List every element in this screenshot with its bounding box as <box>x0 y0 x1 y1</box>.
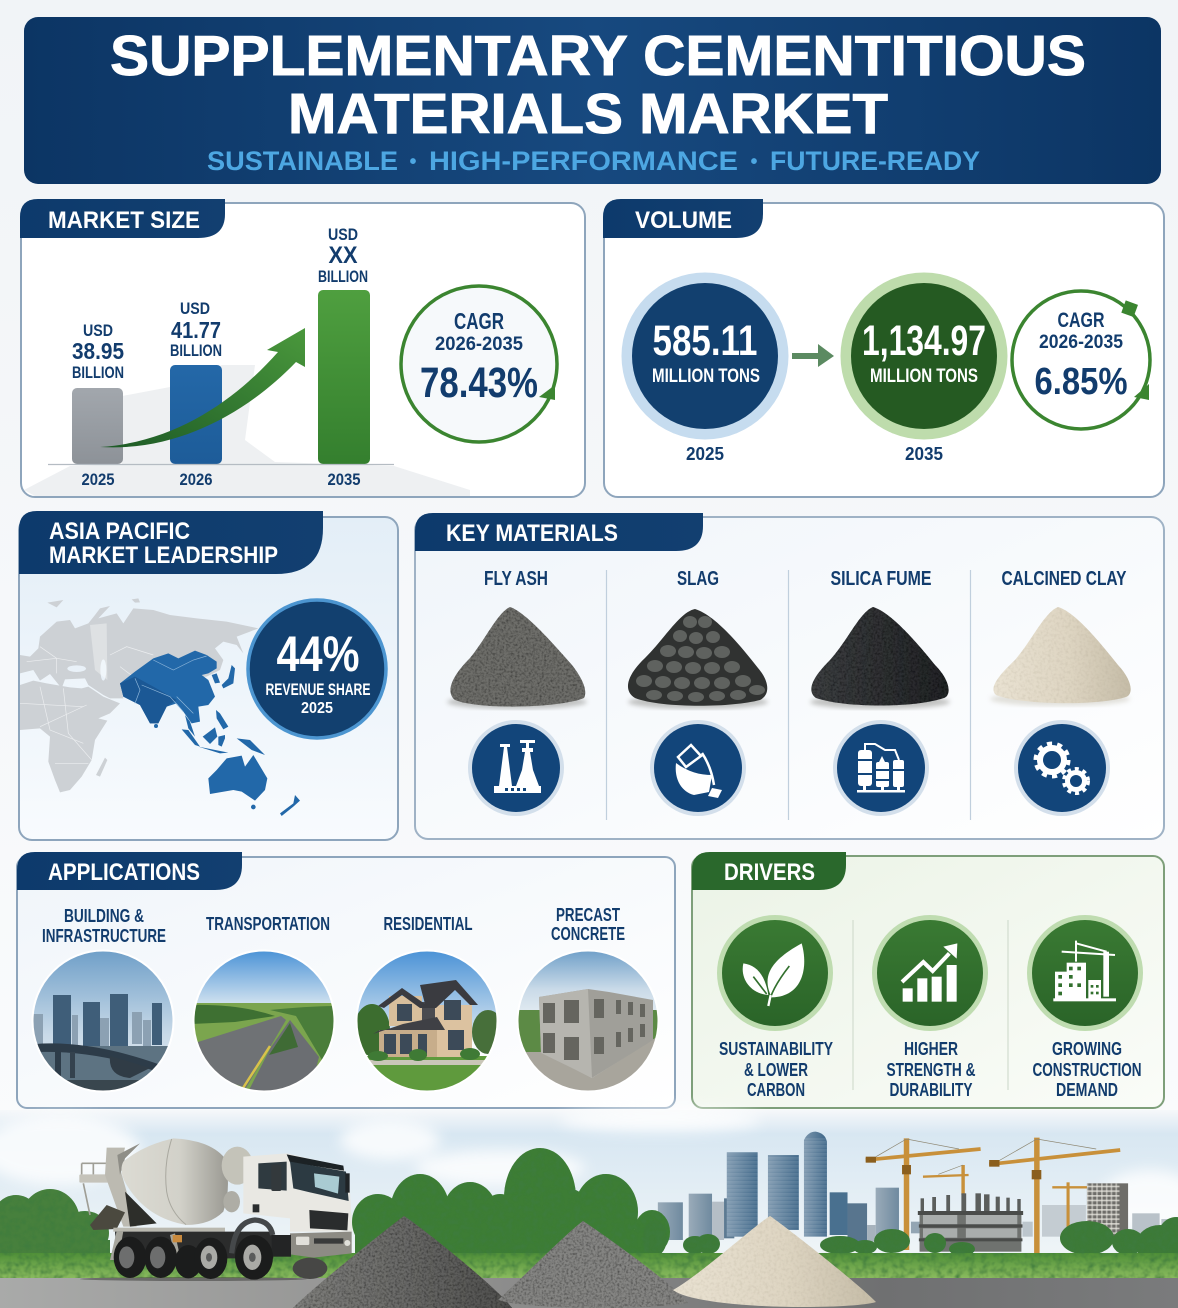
CAGR badge: volume: 6.85% <box>1034 361 1128 403</box>
heading: asia pacific <box>19 511 323 574</box>
heading: volume: VOLUME <box>635 207 732 234</box>
panel: volume <box>603 199 1164 497</box>
driver: strength: HIGHER <box>904 1039 958 1059</box>
volume circle 2025: 2025 <box>686 444 724 464</box>
highrise <box>1087 1183 1128 1240</box>
bar chart: BILLION <box>318 267 368 286</box>
icon: leaf <box>717 915 833 1031</box>
application: precast concrete: CONCRETE <box>551 924 625 944</box>
concrete mixer truck <box>79 1138 352 1281</box>
driver: sustainability: SUSTAINABILITY <box>719 1039 833 1059</box>
heading: drivers: DRIVERS <box>724 859 815 886</box>
title <box>110 24 1086 146</box>
bar chart: 38.95 <box>72 338 124 364</box>
footer scene <box>0 1108 1178 1308</box>
material: fly ash: FLY ASH <box>484 568 548 590</box>
material: slag <box>628 568 768 816</box>
driver: strength: STRENGTH & <box>886 1060 976 1080</box>
icon: growth chart <box>872 915 988 1031</box>
photo: city <box>30 950 176 1094</box>
heading: asia pacific: MARKET LEADERSHIP <box>49 542 278 569</box>
application: transportation: TRANSPORTATION <box>206 914 330 934</box>
callout: revenue share <box>248 600 386 738</box>
material: silica fume: SILICA FUME <box>830 568 932 590</box>
heading: key materials: KEY MATERIALS <box>446 520 618 547</box>
application: precast concrete <box>515 905 661 1095</box>
heading: market size <box>20 199 225 238</box>
bar chart: 2035 <box>328 470 360 489</box>
CAGR badge: market size: CAGR <box>454 308 504 334</box>
icon: tanks <box>833 720 929 816</box>
driver: construction demand: DEMAND <box>1056 1080 1118 1100</box>
subtitle <box>207 146 980 176</box>
CAGR badge: market size: 78.43% <box>420 359 538 407</box>
icon: factory <box>468 720 564 816</box>
application: precast concrete: PRECAST <box>556 905 620 925</box>
heading: applications <box>17 852 242 890</box>
bar chart <box>48 225 394 489</box>
bar chart: 41.77 <box>171 317 221 343</box>
heading: applications: APPLICATIONS <box>48 859 200 886</box>
driver: sustainability: & LOWER <box>744 1060 808 1080</box>
heading: key materials <box>415 513 703 551</box>
material: calcined clay <box>990 568 1131 816</box>
driver: construction demand <box>1027 915 1143 1100</box>
photo: house <box>358 952 496 1090</box>
callout: revenue share: 44% <box>276 626 360 682</box>
driver: strength: DURABILITY <box>890 1080 972 1100</box>
icon: city and crane <box>1027 915 1143 1031</box>
driver: construction demand: GROWING <box>1052 1039 1122 1059</box>
CAGR badge: volume: 2026-2035 <box>1039 332 1123 353</box>
icon: ladle <box>650 720 746 816</box>
subtitle: • <box>409 151 417 173</box>
photo: precast block <box>515 950 661 1095</box>
panel: asia pacific <box>19 511 398 840</box>
driver: strength <box>872 915 988 1100</box>
title: SUPPLEMENTARY CEMENTITIOUS <box>110 24 1086 88</box>
driver: sustainability <box>717 915 833 1100</box>
road <box>0 1278 1178 1308</box>
volume circle 2025: MILLION TONS <box>652 366 760 387</box>
driver: construction demand: CONSTRUCTION <box>1032 1060 1142 1080</box>
photo: highway <box>190 950 340 1093</box>
volume circle 2035: MILLION TONS <box>870 366 978 387</box>
growth arrow <box>100 328 305 447</box>
CAGR badge: market size: 2026-2035 <box>435 334 523 355</box>
bar chart: USD <box>83 321 113 340</box>
application: building and infrastructure <box>30 906 176 1094</box>
grass <box>0 1253 1178 1279</box>
skyline <box>658 1132 1177 1253</box>
application: building and infrastructure: BUILDING & <box>64 906 144 926</box>
callout: revenue share: REVENUE SHARE <box>266 680 370 699</box>
driver: sustainability: CARBON <box>747 1080 805 1100</box>
subtitle: FUTURE-READY <box>770 146 980 176</box>
volume circle 2035 <box>840 272 1008 464</box>
bar chart: 2025 <box>82 470 114 489</box>
panel: market size <box>20 199 585 497</box>
material: calcined clay: CALCINED CLAY <box>1002 568 1127 590</box>
panel: applications <box>17 852 675 1108</box>
volume circle 2025 <box>622 272 788 464</box>
trees <box>0 1148 1178 1267</box>
volume circle 2035: 1,134.97 <box>862 317 986 365</box>
heading: drivers <box>692 852 846 890</box>
subtitle: HIGH-PERFORMANCE <box>429 146 738 176</box>
heading: market size: MARKET SIZE <box>48 207 200 234</box>
application: transportation <box>190 914 340 1093</box>
callout: revenue share: 2025 <box>301 700 333 717</box>
application: building and infrastructure: INFRASTRUCTURE <box>42 926 166 946</box>
panel: key materials <box>415 513 1164 839</box>
icon: gears <box>1014 720 1110 816</box>
tower crane group <box>866 1138 1120 1253</box>
title: MATERIALS MARKET <box>288 82 888 146</box>
bar chart: XX <box>328 242 358 269</box>
map <box>20 598 300 816</box>
bar chart: BILLION <box>72 363 124 382</box>
material: silica fume <box>810 568 950 816</box>
bar chart: USD <box>180 299 210 318</box>
CAGR badge: volume <box>1012 291 1150 429</box>
application: residential: RESIDENTIAL <box>384 914 472 934</box>
volume circle 2025: 585.11 <box>652 317 758 365</box>
bar chart: 2026 <box>180 470 212 489</box>
bar chart: USD <box>328 225 358 244</box>
panel: drivers <box>692 852 1164 1108</box>
volume circle 2035: 2035 <box>905 444 943 464</box>
material: slag: SLAG <box>677 568 719 590</box>
heading: asia pacific: ASIA PACIFIC <box>49 518 190 545</box>
material: fly ash <box>447 568 587 816</box>
CAGR badge: market size <box>401 286 557 442</box>
arrow between volumes <box>792 344 834 367</box>
subtitle: SUSTAINABLE <box>207 146 398 176</box>
application: residential <box>358 917 496 1090</box>
CAGR badge: volume: CAGR <box>1058 309 1104 332</box>
subtitle: • <box>750 151 758 173</box>
aggregate piles <box>293 1216 876 1308</box>
bar chart: BILLION <box>170 341 222 360</box>
concrete frame under construction <box>918 1193 1023 1252</box>
heading: volume <box>603 199 763 238</box>
title banner <box>24 17 1161 184</box>
